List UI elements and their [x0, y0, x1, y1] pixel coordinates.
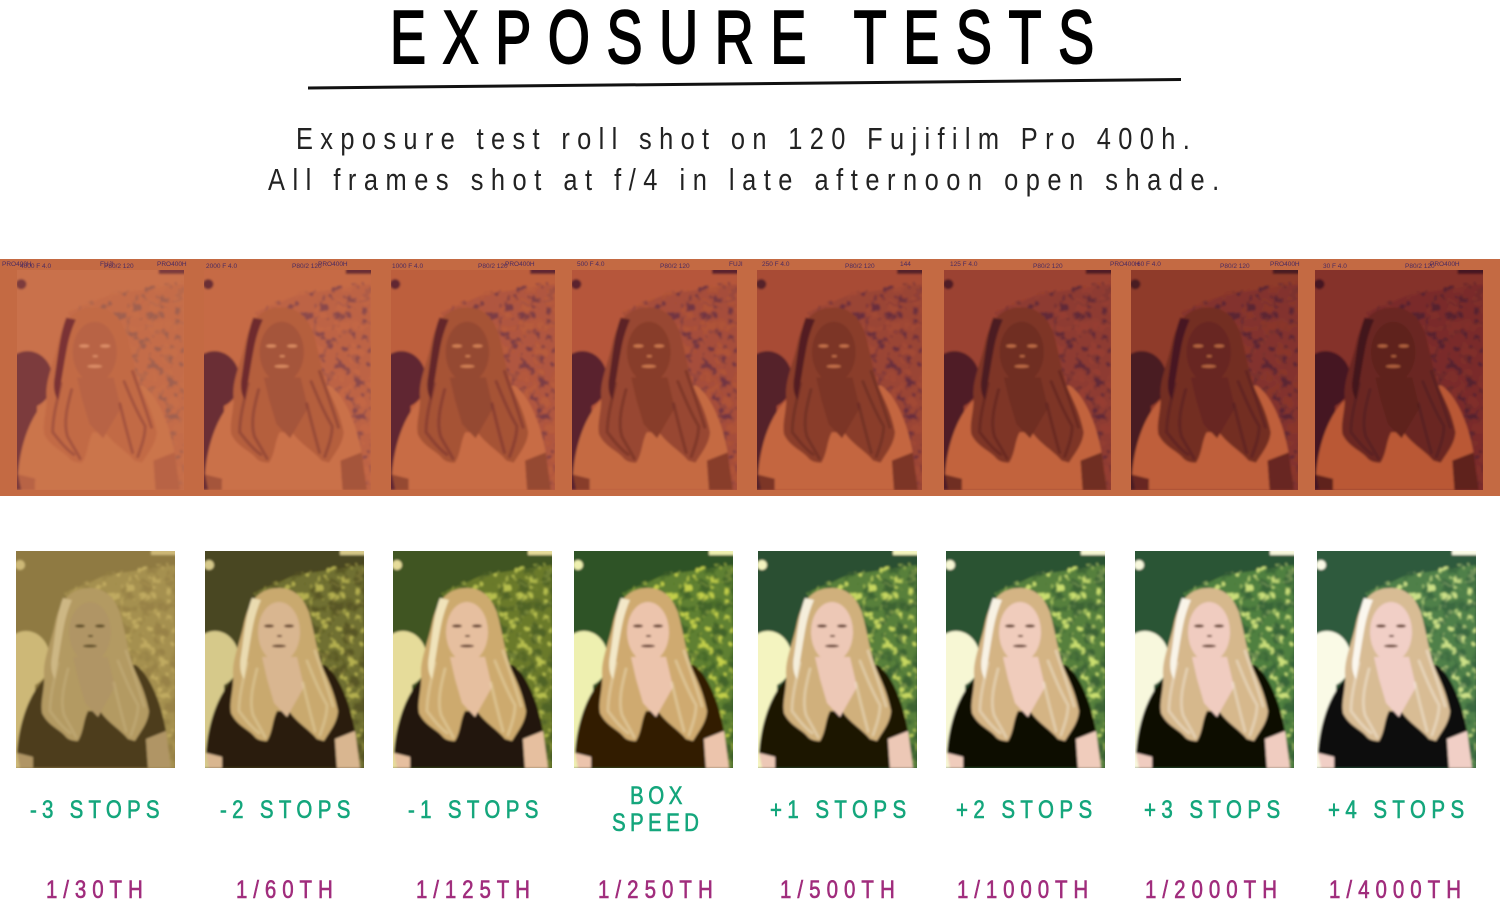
negative frame: 1/60th -2 stops: [189, 267, 374, 493]
shutter speed labels: [46, 875, 1461, 903]
film edge markings: P80/2 120: [292, 263, 322, 270]
film edge markings: PRO400H: [157, 261, 187, 268]
stop labels: [30, 781, 1464, 836]
film edge markings: P80/2 120: [1405, 263, 1435, 270]
film edge markings: 60 F 4.0: [1137, 261, 1161, 268]
film edge markings: P80/2 120: [478, 263, 508, 270]
film edge markings: PRO400H: [1270, 261, 1300, 268]
negative frame: 1/1000th +2 stops: [929, 267, 1114, 493]
stop labels: -3 STOPS: [30, 795, 160, 823]
negative frame: 1/30th -3 stops: [2, 267, 187, 493]
panel: positive scans: [2, 548, 1479, 771]
shutter speed labels: 1/4000TH: [1329, 875, 1461, 903]
stop labels: +2 STOPS: [956, 795, 1092, 823]
photo: -1 stop: [379, 548, 555, 771]
stop labels: -1 STOPS: [408, 795, 538, 823]
stop labels: +1 STOPS: [770, 795, 906, 823]
film edge markings: 250 F 4.0: [762, 261, 790, 268]
stop labels: -2 STOPS: [220, 795, 350, 823]
shutter speed labels: 1/1000TH: [957, 875, 1088, 903]
photo: -2 stops: [191, 548, 367, 771]
photo: +1 stop: [744, 548, 920, 771]
shutter speed labels: 1/125TH: [416, 875, 530, 903]
film edge markings: P80/2 120: [660, 263, 690, 270]
stop labels: SPEED: [612, 808, 699, 836]
negative frame: 1/125th -1 stop: [377, 267, 558, 493]
film edge markings: PRO400H: [1430, 261, 1460, 268]
film edge markings: P80/2 120: [1220, 263, 1250, 270]
photo: +4 stops: [1303, 548, 1479, 771]
film edge markings: P80/2 120: [104, 263, 134, 270]
film edge markings: P80/2 120: [845, 263, 875, 270]
film edge markings: PRO400H: [318, 261, 348, 268]
panel: negative film strip: [0, 259, 1500, 496]
film edge markings: FUJI: [729, 261, 743, 268]
photo: -3 stops: [2, 548, 178, 771]
film edge markings: 144: [900, 261, 911, 268]
film edge markings: PRO400H: [505, 261, 535, 268]
film edge markings: 500 F 4.0: [577, 261, 605, 268]
stop labels: +3 STOPS: [1144, 795, 1280, 823]
photo: +2 stops: [932, 548, 1108, 771]
film edge markings: PRO400H: [1110, 261, 1140, 268]
film edge markings: 1000 F 4.0: [392, 263, 423, 270]
film edge markings: PRO400H: [2, 261, 32, 268]
film edge markings: [2, 261, 1460, 270]
shutter speed labels: 1/30TH: [46, 875, 143, 903]
shutter speed labels: 1/250TH: [598, 875, 713, 903]
title underline: [308, 80, 1181, 88]
film edge markings: 2000 F 4.0: [206, 263, 237, 270]
subtitle: [268, 122, 1219, 198]
photo: +3 stops: [1121, 548, 1297, 771]
negative frame: 1/250th box speed: [557, 267, 740, 493]
film edge markings: FUJI: [100, 261, 114, 268]
subtitle: Exposure test roll shot on 120 Fujifilm Pro 400h.: [296, 122, 1190, 157]
shutter speed labels: 1/2000TH: [1145, 875, 1277, 903]
film edge markings: 30 F 4.0: [1323, 263, 1347, 270]
shutter speed labels: 1/500TH: [780, 875, 895, 903]
film edge markings: P80/2 120: [1033, 263, 1063, 270]
negative frame: 1/500th +1 stop: [742, 267, 925, 493]
subtitle: All frames shot at f/4 in late afternoon open shade.: [268, 163, 1219, 198]
shutter speed labels: 1/60TH: [236, 875, 333, 903]
photo: box speed: [560, 548, 736, 771]
film edge markings: 4000 F 4.0: [20, 263, 51, 270]
negative frame: 1/2000th +3 stops: [1116, 267, 1301, 493]
film edge markings: 125 F 4.0: [950, 261, 978, 268]
stop labels: BOX: [630, 781, 682, 809]
stop labels: +4 STOPS: [1328, 795, 1464, 823]
negative frame: 1/4000th +4 stops: [1300, 267, 1486, 493]
